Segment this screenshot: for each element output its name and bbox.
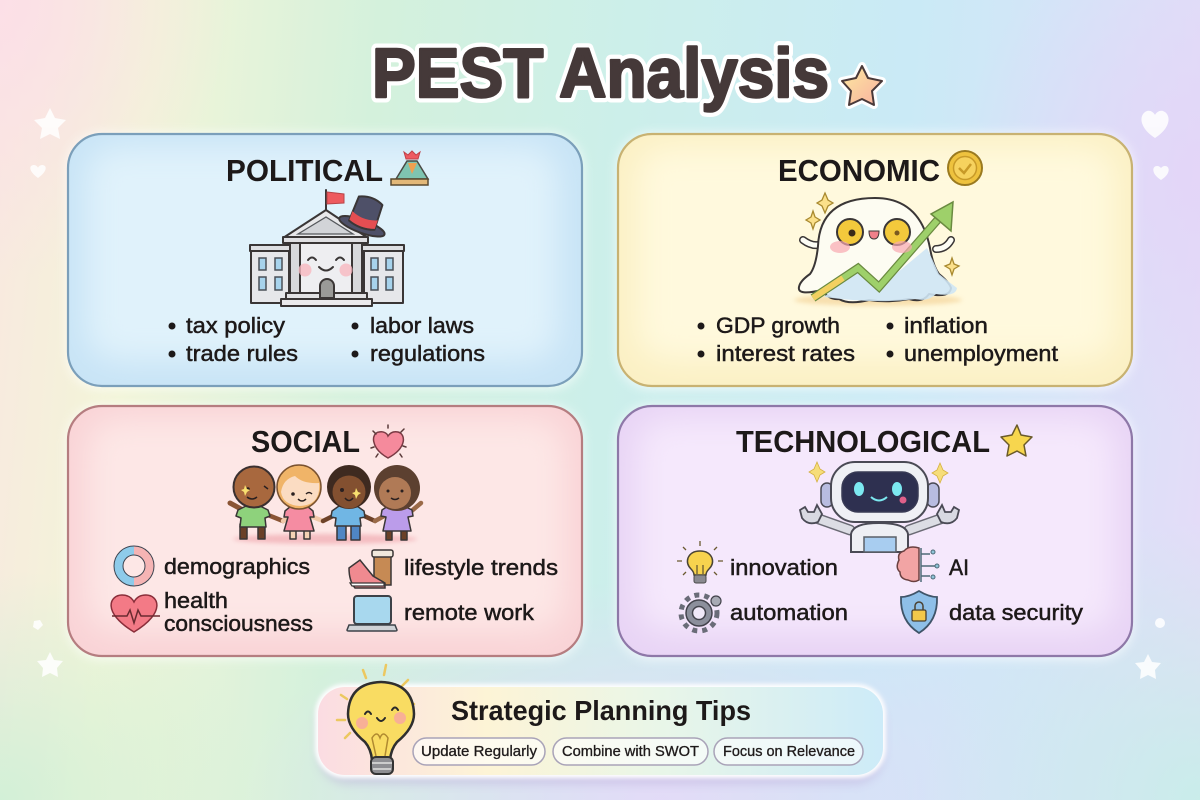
bullet list: economic: inflation [904,313,988,338]
list item: remote work: remote work [404,600,535,625]
illustration: government building with hat [250,190,404,306]
list item: demographics: demographics [164,554,310,579]
list item: health consciousness [111,588,313,636]
list item: AI: AI [949,555,969,580]
list item: data security [901,591,1084,633]
illustration: happy blob with growth arrow [794,193,962,306]
decorative stars and hearts [30,108,1169,679]
icon: smiling light bulb [337,665,414,774]
list item: AI [897,547,969,582]
icon: coin [948,151,982,185]
list item: automation: automation [730,600,848,625]
bullet list: economic: GDP growth [716,313,840,338]
bullet list: political: regulations [370,341,485,366]
pill: combine with swot [553,738,708,765]
panel: economic [616,132,1134,390]
panel: political [66,132,584,390]
list item: lifestyle trends [349,550,558,588]
list item: automation [681,595,848,631]
heading: tips: Strategic Planning Tips [451,695,751,726]
bullet list: economic: unemployment [904,341,1059,366]
panel: strategic planning tips [315,665,886,784]
pill: focus on relevance [714,738,863,765]
bullet list: economic [698,313,1059,366]
heading: economic: ECONOMIC [778,153,940,188]
pill: update regularly: Update Regularly [421,743,537,760]
icon: star [1001,425,1032,456]
list item: demographics [118,550,310,582]
bullet list: political: trade rules [186,341,298,366]
list item: remote work [347,596,535,631]
list item: health consciousness: consciousness [164,611,313,636]
bullet list: economic: interest rates [716,341,855,366]
panel: social [66,404,584,660]
bullet list: political [168,313,485,366]
list item: innovation [677,541,838,583]
list item: lifestyle trends: lifestyle trends [404,555,558,580]
pill: update regularly [413,738,545,765]
title: PEST Analysis [372,34,829,112]
heading: social: SOCIAL [251,424,360,459]
illustration: four children holding hands [230,465,421,544]
illustration: robot [800,462,959,552]
title: PEST Analysis [372,34,829,112]
heading: technological: TECHNOLOGICAL [736,424,990,459]
bullet list: political: tax policy [186,313,286,338]
pill: combine with swot: Combine with SWOT [562,743,699,760]
panel: technological [616,404,1134,660]
list item: data security: data security [949,600,1084,625]
icon: podium [391,151,428,185]
icon: heart [371,425,406,458]
icon: title star [842,66,882,105]
heading: political: POLITICAL [226,153,383,188]
pill: focus on relevance: Focus on Relevance [723,743,855,760]
list item: innovation: innovation [730,555,838,580]
bullet list: political: labor laws [370,313,474,338]
list item: health consciousness: health [164,588,228,613]
